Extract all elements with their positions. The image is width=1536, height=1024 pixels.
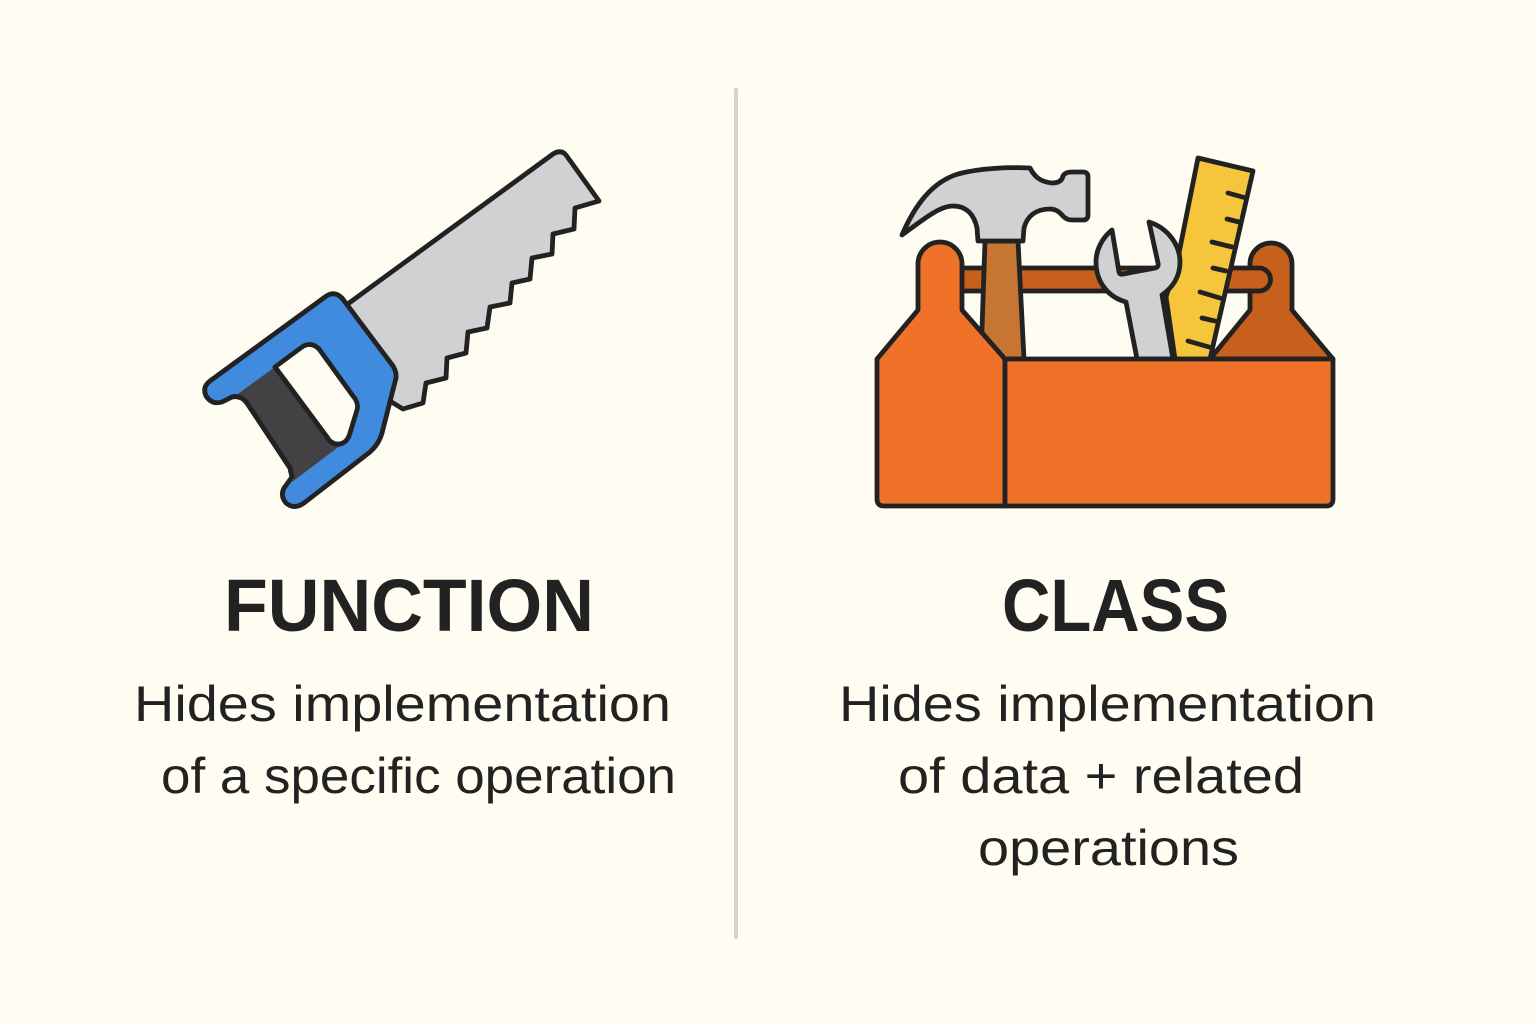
description: class: operations	[978, 820, 1239, 876]
toolbox carry bar	[950, 268, 1270, 291]
saw grip	[235, 367, 341, 482]
description: function: of a specific operation	[161, 748, 676, 804]
saw blade	[345, 152, 599, 409]
toolbox right end	[1210, 243, 1333, 359]
saw handle	[205, 294, 396, 506]
description: function	[134, 676, 676, 804]
icon: toolbox	[877, 158, 1333, 506]
toolbox left end	[877, 242, 1005, 506]
toolbox front	[1005, 359, 1333, 506]
description: class	[839, 676, 1376, 876]
panel: class	[839, 158, 1376, 876]
wrench	[1096, 222, 1180, 359]
panel: function	[134, 152, 676, 804]
description: class: Hides implementation	[839, 676, 1376, 732]
description: function: Hides implementation	[134, 676, 671, 732]
description: class: of data + related	[898, 748, 1304, 804]
ruler	[1166, 158, 1253, 359]
heading: class: CLASS	[1002, 564, 1229, 647]
hammer head	[902, 168, 1088, 241]
hammer handle	[981, 241, 1024, 359]
icon: hand saw	[205, 152, 599, 506]
divider	[734, 88, 738, 939]
heading: function: FUNCTION	[224, 564, 594, 647]
